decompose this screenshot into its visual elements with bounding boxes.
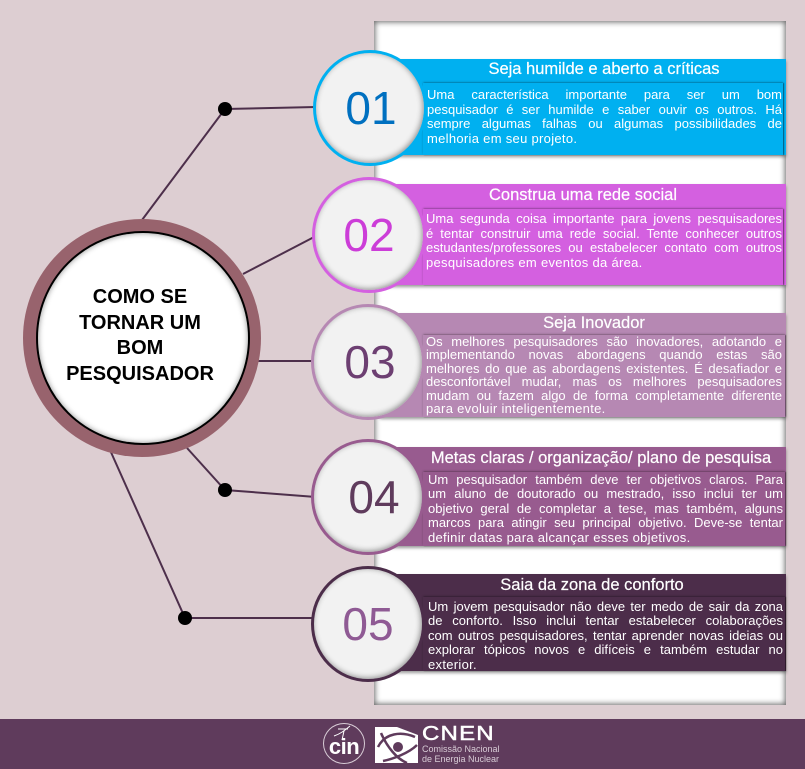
heading 02: Construa uma rede social (489, 186, 677, 204)
logo: cnen subtitle: de Energia Nuclear (422, 754, 499, 764)
text 01: melhoria em seu projeto. (427, 130, 577, 146)
circle 03 (311, 304, 425, 420)
band 04 (380, 447, 786, 546)
text 01: pesquisador é ser humilde e saber ouvir os outros. Há (427, 102, 782, 116)
text 02 (426, 211, 782, 270)
panel: item 05 (311, 566, 788, 682)
main title: PESQUISADOR (66, 362, 214, 384)
text 02: é tentar construir uma rede social. Tente conhecer outros (426, 226, 782, 241)
logo: cnen emblem (375, 727, 418, 763)
logo: cin: cin (329, 734, 359, 759)
band 02 (380, 184, 786, 285)
number 03: 03 (344, 336, 396, 388)
band 05 (380, 574, 786, 671)
text 04 (428, 472, 783, 545)
central circle inner disc (36, 231, 250, 445)
circle 05 (311, 566, 425, 682)
number 01: 01 (345, 82, 397, 134)
text 02: pesquisadores em eventos da área. (426, 255, 643, 270)
text 03: melhores do que as abordagens existentes. É desafiador e (426, 361, 782, 376)
text 01 (427, 87, 782, 146)
heading 03: Seja Inovador (543, 314, 645, 332)
band 02 inner box (423, 209, 783, 285)
circle 04 (311, 439, 425, 555)
text 05: exterior. (428, 657, 477, 672)
main title: COMO SE (93, 286, 187, 308)
icon: cin swoosh (334, 726, 350, 740)
band 05 inner box (423, 597, 785, 671)
text 05 (428, 599, 783, 672)
text 03: implementando novas abordagens quando estas são (426, 347, 782, 362)
text 02: Uma segunda coisa importante para jovens pesquisadores (426, 211, 782, 226)
text 03: Os melhores pesquisadores são inovadores, adotando e (426, 334, 782, 349)
panel: item 01 (313, 50, 788, 166)
text 04: um aluno de doutorado ou mestrado, isso inclui ter um (428, 486, 783, 501)
central circle (23, 219, 261, 457)
band 03 inner box (423, 335, 785, 417)
heading 04: Metas claras / organização/ plano de pesquisa (431, 449, 771, 467)
logo: cnen wordmark: CNEN (422, 723, 495, 745)
text 01: sempre algumas falhas ou algumas possibilidades de (427, 116, 782, 131)
white background panel (374, 21, 786, 705)
number 04: 04 (348, 471, 400, 523)
panel: item 04 (311, 439, 788, 555)
text 04: Um pesquisador também deve ter objetivos claros. Para (428, 472, 783, 487)
text 03: para evoluir inteligentemente. (426, 401, 606, 416)
text 05: com outros pesquisadores, tentar aprender novas ideias ou (428, 628, 783, 643)
text 03: desconfortável mudar, mas os melhores pesquisadores (426, 374, 782, 389)
circle 01 (313, 50, 427, 166)
text 03: mudam ou fazem algo de forma completamente diferente (426, 388, 782, 403)
text 01: Uma característica importante para ser um bom (427, 87, 782, 102)
number 05: 05 (342, 598, 394, 650)
number 02: 02 (343, 209, 395, 261)
text 05: explorar tópicos novos e difíceis e também estudar no (428, 642, 783, 657)
logo: cnen subtitle (422, 744, 500, 764)
text 04: objetivo geral de completar a tese, mas também, alguns (428, 501, 783, 516)
footer bar (0, 719, 805, 769)
text 05: de conforto. Isso inclui tentar estabelecer colaborações (428, 613, 783, 628)
band 01 (380, 59, 786, 155)
band 01 inner box (423, 83, 783, 155)
logo: cin (323, 723, 365, 764)
text 04: definir datas para alcançar esses objetivos. (428, 530, 691, 545)
text 02: estudantes/professores ou estabelecer contato com outros (426, 240, 782, 255)
main title: TORNAR UM (79, 312, 201, 334)
heading 05: Saia da zona de conforto (500, 576, 684, 594)
main title (66, 286, 214, 384)
text 04: marcos para atingir seu principal objetivo. Deve-se tentar (428, 515, 783, 530)
logo: cnen subtitle: Comissão Nacional (422, 744, 500, 754)
band 04 inner box (423, 472, 785, 546)
panel: item 03 (311, 304, 788, 421)
text 05: Um jovem pesquisador não deve ter medo de sair da zona (428, 599, 783, 614)
band 03 (380, 313, 786, 417)
text 03 (426, 334, 782, 416)
panel: item 02 (312, 177, 788, 293)
main title: BOM (117, 337, 163, 359)
circle 02 (312, 177, 426, 293)
heading 01: Seja humilde e aberto a críticas (488, 60, 720, 78)
